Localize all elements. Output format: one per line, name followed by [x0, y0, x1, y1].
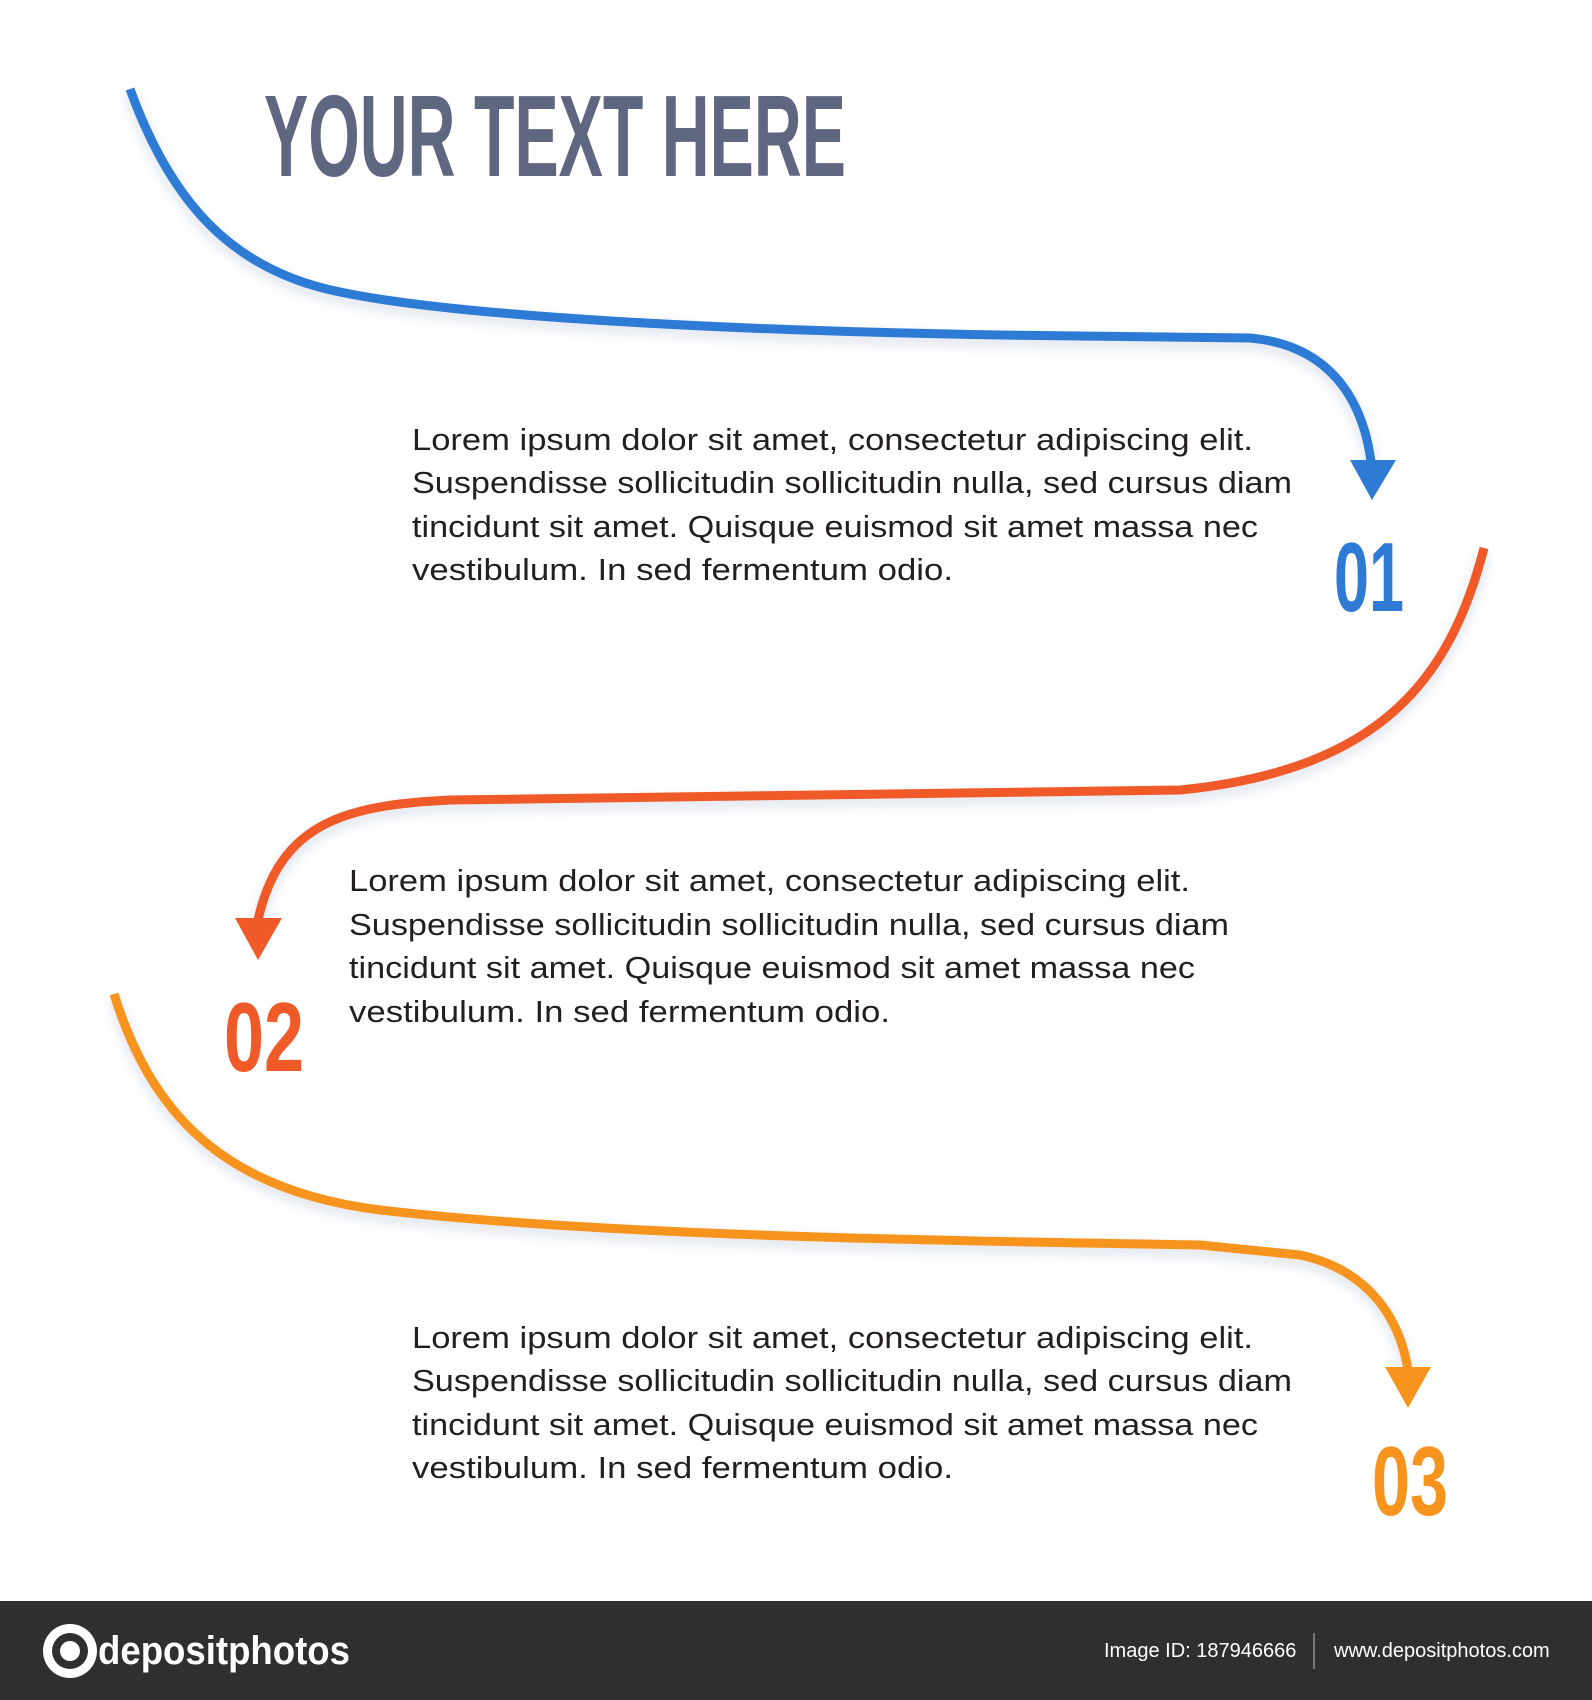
text block 3: [412, 1320, 1292, 1485]
footer bar: [0, 1601, 1592, 1700]
text block 1: [412, 422, 1292, 587]
text block 1: Suspendisse sollicitudin sollicitudin nulla, sed cursus diam: [412, 465, 1292, 500]
footer bar: depositphotos: [98, 1629, 350, 1673]
number 02: 02: [224, 982, 304, 1092]
footer bar: Image ID: 187946666: [1104, 1640, 1296, 1662]
text block 1: tincidunt sit amet. Quisque euismod sit amet massa nec: [412, 509, 1258, 544]
text block 2: Lorem ipsum dolor sit amet, consectetur adipiscing elit.: [349, 863, 1190, 898]
text block 3: Lorem ipsum dolor sit amet, consectetur adipiscing elit.: [412, 1320, 1253, 1355]
text block 2: Suspendisse sollicitudin sollicitudin nulla, sed cursus diam: [349, 907, 1229, 942]
text block 3: vestibulum. In sed fermentum odio.: [412, 1450, 953, 1485]
icon: logo: [43, 1624, 97, 1678]
text block 3: Suspendisse sollicitudin sollicitudin nulla, sed cursus diam: [412, 1363, 1292, 1398]
text block 1: Lorem ipsum dolor sit amet, consectetur adipiscing elit.: [412, 422, 1253, 457]
text block 2: vestibulum. In sed fermentum odio.: [349, 994, 890, 1029]
number 01: 01: [1334, 522, 1404, 632]
text block 1: vestibulum. In sed fermentum odio.: [412, 552, 953, 587]
title: YOUR TEXT HERE: [264, 71, 846, 201]
text block 2: [349, 863, 1229, 1029]
arrow: orange curve: [114, 994, 1431, 1408]
arrow: blue curve: [130, 89, 1396, 500]
arrow: orange-red curve: [235, 548, 1484, 960]
text block 3: tincidunt sit amet. Quisque euismod sit amet massa nec: [412, 1407, 1258, 1442]
number 03: 03: [1372, 1426, 1448, 1536]
footer bar: www.depositphotos.com: [1333, 1640, 1550, 1662]
text block 2: tincidunt sit amet. Quisque euismod sit amet massa nec: [349, 950, 1195, 985]
